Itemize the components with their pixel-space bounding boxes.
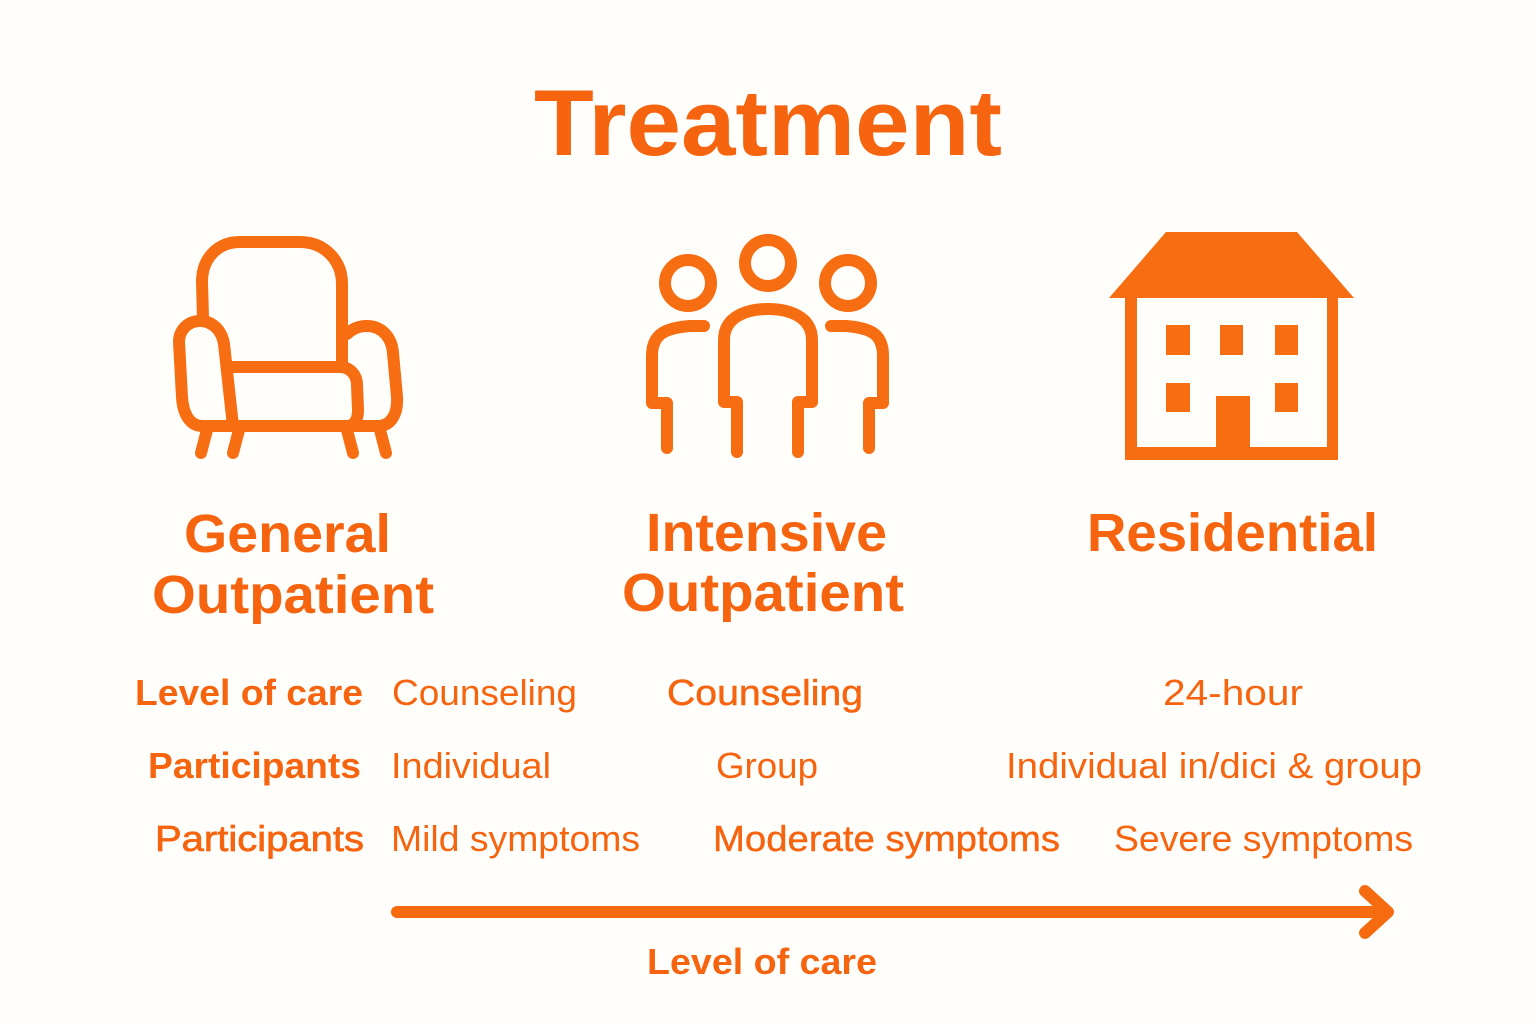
heading: Intensive Outpatient [622, 503, 904, 623]
arrow label: Level of care [647, 941, 877, 982]
row: level of care: Counseling [392, 672, 577, 713]
row: level of care: 24-hour [1163, 672, 1303, 713]
title: Treatment [534, 70, 1002, 175]
row: symptoms: Severe symptoms [1114, 818, 1413, 859]
row: level of care: Level of care [135, 672, 363, 713]
icon: group of three people [652, 240, 883, 452]
arrow: level of care [397, 891, 1388, 933]
icon: armchair [179, 242, 397, 453]
heading: General Outpatient: Outpatient [152, 565, 434, 625]
row: participants: Individual in/dici & group [1006, 745, 1422, 786]
row: symptoms: Mild symptoms [391, 818, 640, 859]
row: participants: Participants [148, 745, 361, 786]
heading: General Outpatient: General [184, 504, 391, 564]
row: symptoms [155, 818, 1413, 859]
row: symptoms: Participants [155, 818, 364, 859]
heading: Intensive Outpatient: Outpatient [622, 563, 904, 623]
heading: Intensive Outpatient: Intensive [646, 503, 887, 563]
row: participants [148, 745, 1422, 786]
row: level of care: Counseling [667, 672, 863, 713]
heading: Residential: Residential [1087, 503, 1378, 563]
row: symptoms: Moderate symptoms [713, 818, 1060, 859]
row: participants: Group [716, 745, 818, 786]
row: participants: Individual [391, 745, 551, 786]
icon: residential house [1109, 232, 1354, 460]
heading: General Outpatient [152, 504, 434, 625]
row: level of care [135, 672, 1303, 713]
